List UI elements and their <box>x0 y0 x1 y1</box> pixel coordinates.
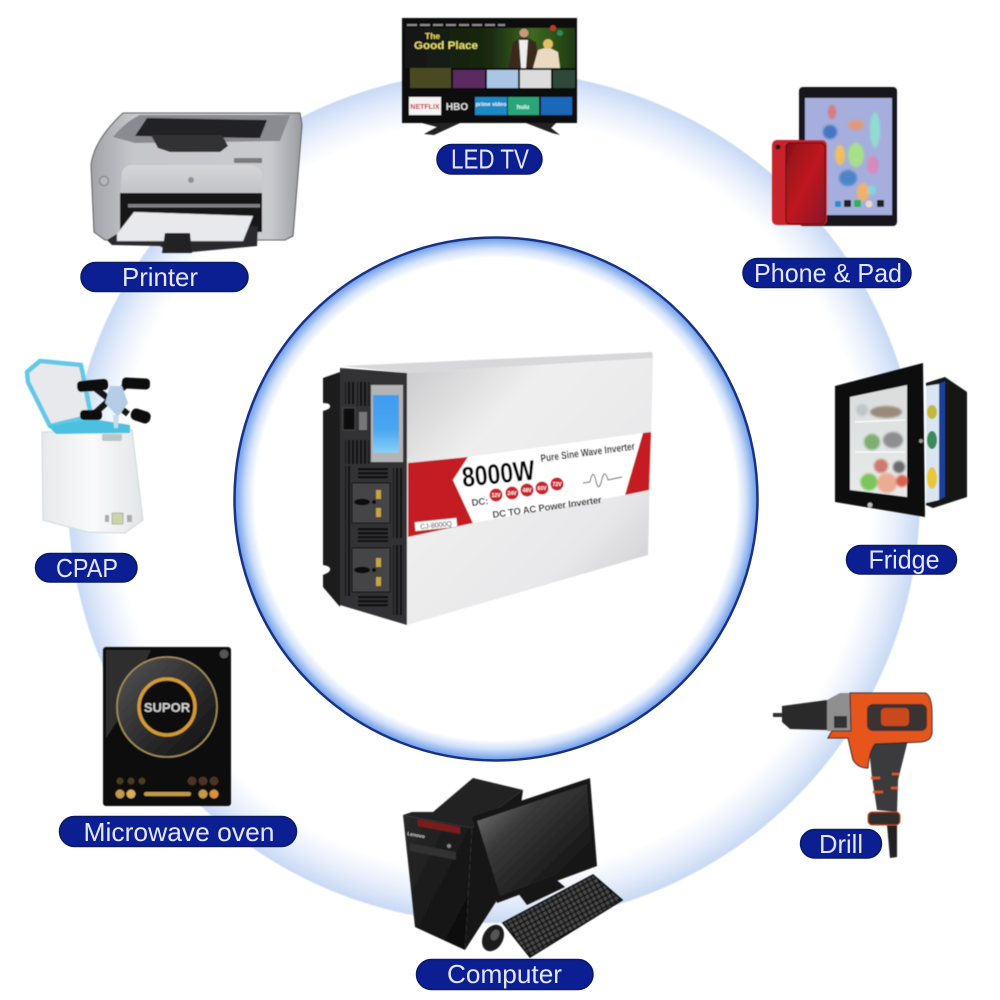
tower drive bay <box>410 819 460 860</box>
drill motor housing <box>828 693 932 768</box>
central circle frame <box>234 238 758 760</box>
wattage: 8000W <box>460 454 537 493</box>
model tag: CJ-8000Q <box>420 521 453 531</box>
cabinet blue light <box>939 381 945 500</box>
shelf contents <box>856 404 908 493</box>
heating zone <box>117 657 217 757</box>
pill label: fridge <box>846 544 956 574</box>
TV show title <box>414 31 478 52</box>
monitor frame <box>472 778 597 903</box>
pill label: drill: Drill <box>819 829 863 859</box>
drill metal collar <box>827 693 852 731</box>
keyboard <box>503 875 622 957</box>
CPAP mask headgear <box>77 377 152 428</box>
inverter silver body <box>407 358 653 625</box>
phone screen <box>786 143 825 224</box>
device: LED TV <box>402 18 577 135</box>
corner dial <box>220 650 228 658</box>
paper stack <box>117 212 253 241</box>
drill power cord <box>887 825 897 858</box>
door lock <box>868 502 872 508</box>
power switch <box>343 408 355 430</box>
device: drill <box>773 693 932 858</box>
device: induction cooker <box>103 647 231 806</box>
phone body <box>772 140 827 225</box>
product: 8000W inverter <box>323 352 653 625</box>
tablet body <box>799 87 897 226</box>
device: printer <box>91 113 302 253</box>
TV app tiles: hulu <box>517 105 530 111</box>
fridge interior strip <box>926 384 939 503</box>
DC voltage row: 72V <box>553 482 562 488</box>
power button <box>100 176 108 186</box>
pill label: fridge: Fridge <box>868 544 940 574</box>
TV hero figures <box>508 25 563 68</box>
pill label: computer: Computer <box>447 959 562 989</box>
housing badge <box>881 708 909 726</box>
DC voltage row: 60V <box>538 486 547 492</box>
pill label: phone and pad: Phone & Pad <box>754 258 902 288</box>
tower top <box>403 778 523 828</box>
DC voltage row: 12V <box>492 493 501 499</box>
USB port <box>359 412 367 430</box>
front cover <box>120 165 262 197</box>
pill label: LED TV: LED TV <box>451 144 529 174</box>
DC voltage row: 24V <box>508 491 517 497</box>
fridge door <box>835 363 925 517</box>
AC socket 1 <box>352 483 390 523</box>
TV frame <box>402 18 577 123</box>
DC voltage row: DC: <box>471 496 489 509</box>
phone camera <box>776 144 780 150</box>
inverter top edge <box>342 352 653 373</box>
outer connecting ring <box>67 70 921 924</box>
paper slot <box>120 193 262 234</box>
interior fruit <box>927 405 937 489</box>
pill label: computer <box>416 959 593 990</box>
tower brand: Lenovo <box>407 831 425 840</box>
red band right <box>625 432 651 495</box>
gold ring <box>139 679 195 735</box>
pill label: printer: Printer <box>122 262 198 292</box>
pill label: microwave oven: Microwave oven <box>84 817 274 847</box>
TV stand <box>422 123 560 135</box>
drill chuck <box>782 700 827 730</box>
device: phone and pad <box>772 87 897 226</box>
AC socket 2 <box>352 548 390 592</box>
tablet screen <box>805 98 892 215</box>
sine wave symbol <box>583 474 622 487</box>
printer body <box>91 113 302 240</box>
housing dark insert <box>867 704 927 731</box>
pill label: CPAP: CPAP <box>56 553 118 583</box>
TV app tiles: NETFLIX <box>410 104 440 111</box>
device: CPAP <box>27 361 152 533</box>
CPAP lid <box>27 361 91 426</box>
mouse <box>478 921 508 955</box>
TV app tiles <box>409 97 572 115</box>
output flap <box>151 135 228 152</box>
DC voltage row: 48V <box>523 488 532 494</box>
handle grips <box>871 774 899 792</box>
logo dot <box>188 177 194 183</box>
printer model badge <box>234 158 262 163</box>
body handle <box>102 434 122 441</box>
CPAP teal rim <box>48 419 130 434</box>
control buttons <box>116 776 218 798</box>
TV app tiles: prime video <box>476 102 507 108</box>
device: computer <box>403 778 622 957</box>
tower front <box>403 815 472 950</box>
door handle <box>919 439 923 443</box>
door shelves <box>855 420 905 452</box>
printer top recess <box>113 115 290 143</box>
white band center <box>453 433 643 523</box>
panel sheen <box>106 650 151 738</box>
pill label: drill <box>800 829 882 859</box>
tower side <box>465 790 523 950</box>
pill label: CPAP <box>36 553 137 583</box>
drill handle <box>868 740 908 812</box>
model tag <box>415 518 457 532</box>
tray clip <box>162 233 192 253</box>
LCD display <box>371 385 403 462</box>
brand: SUPOR <box>144 700 191 715</box>
fridge cabinet <box>926 377 967 508</box>
device: fridge <box>835 363 967 517</box>
output slot <box>135 118 267 138</box>
handle collar <box>868 812 900 825</box>
DC voltage row <box>471 478 564 509</box>
paper tray <box>107 226 258 252</box>
TV menu bar <box>407 24 505 26</box>
monitor stand <box>518 877 565 905</box>
TV app tiles: HBO <box>446 102 468 113</box>
tablet artwork <box>823 105 880 201</box>
red band left <box>408 457 473 537</box>
TV thumbnail row <box>410 68 575 88</box>
TV hero image <box>405 28 575 68</box>
drill bit tip <box>773 713 783 717</box>
cooker panel <box>103 647 231 806</box>
monitor screen <box>477 784 592 896</box>
inverter front panel <box>340 368 407 625</box>
conversion caption: DC TO AC Power Inverter <box>492 495 603 521</box>
tablet dock <box>835 200 884 208</box>
inverter mounting bracket <box>323 372 340 607</box>
product name: Pure Sine Wave Inverter <box>540 441 636 465</box>
CPAP display <box>105 513 132 524</box>
door glass <box>850 385 907 497</box>
TV show title: The <box>425 31 440 41</box>
TV show title: Good Place <box>414 40 478 52</box>
CPAP body <box>42 430 143 533</box>
pill label: printer <box>81 262 248 292</box>
